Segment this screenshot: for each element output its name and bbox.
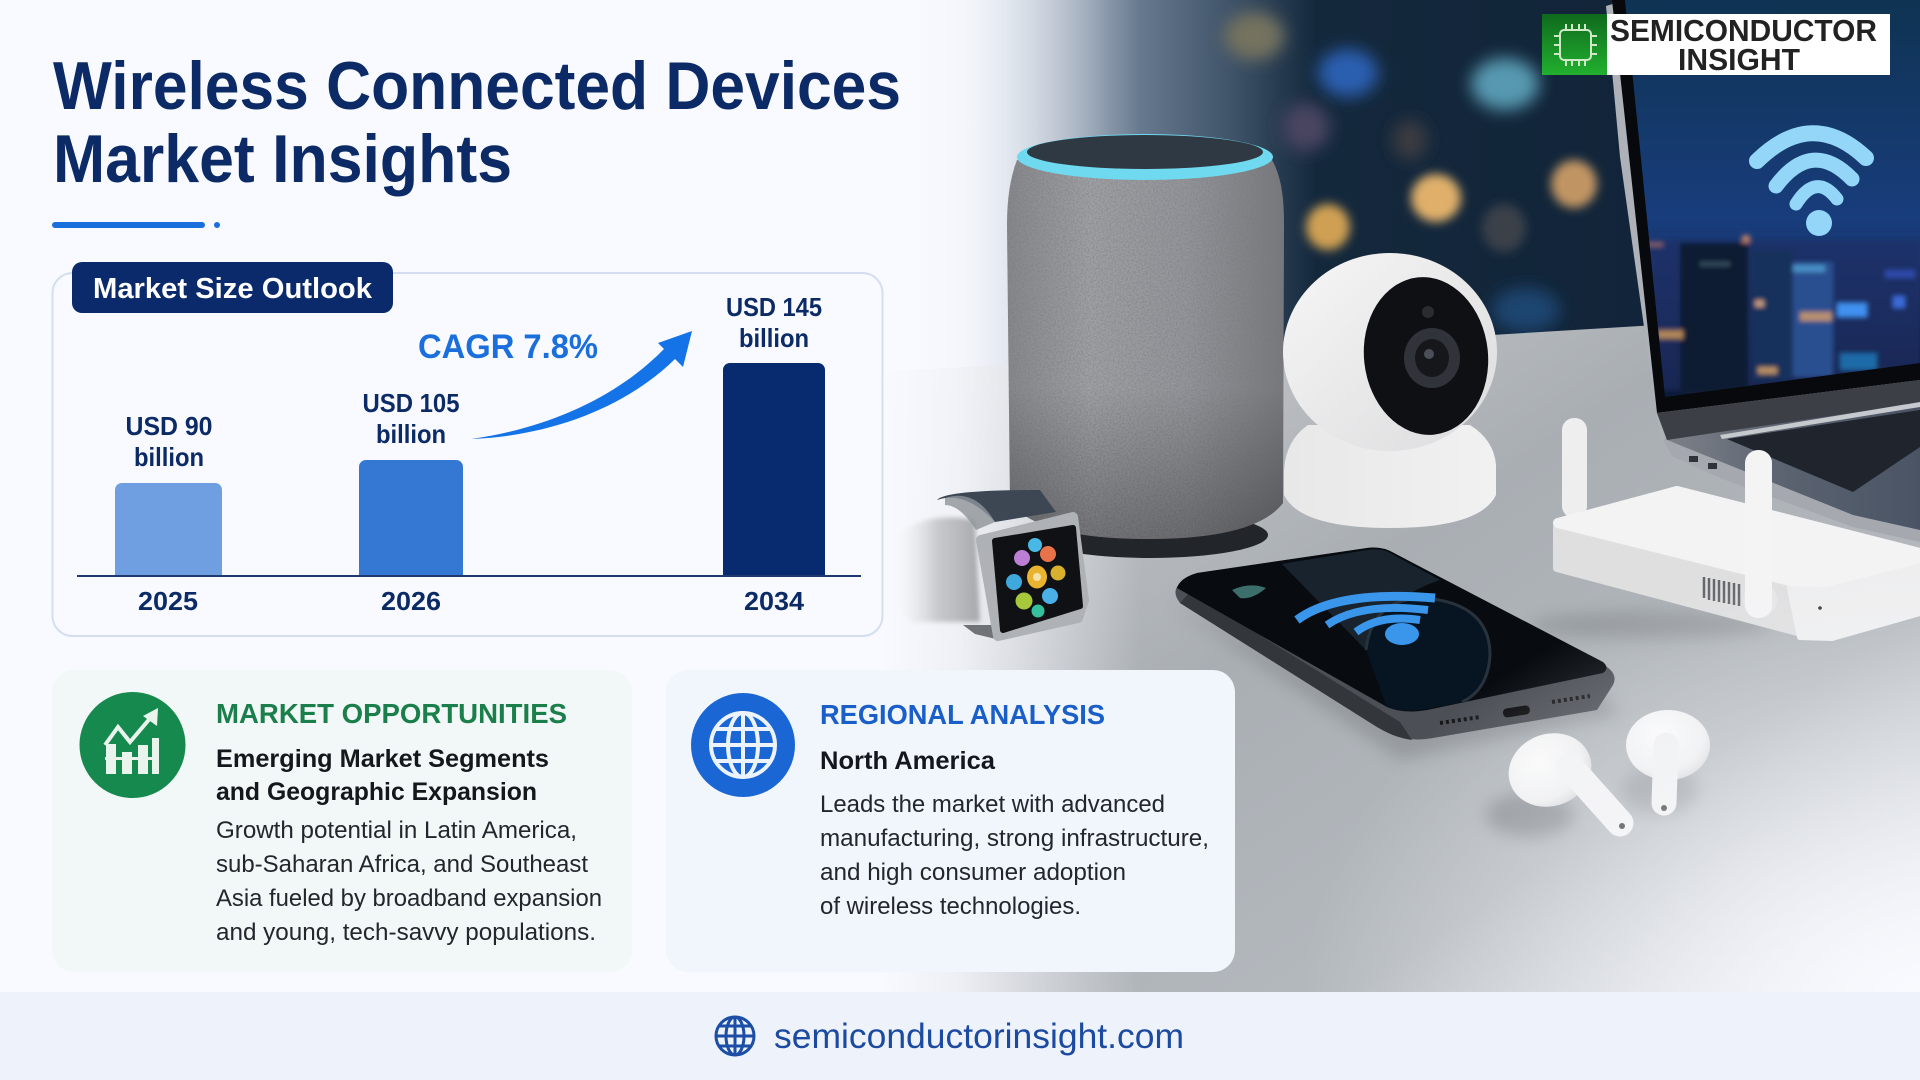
body text: opportunities: sub-Saharan Africa, and Southeast	[216, 851, 588, 878]
logo: Semiconductor Insight	[1542, 13, 1890, 77]
heading: market opportunities: MARKET OPPORTUNITIES	[216, 698, 567, 729]
phone ports	[1502, 705, 1530, 718]
faded watch band	[893, 518, 980, 622]
panel: regional analysis	[666, 670, 1235, 972]
value labels: USD 90	[126, 411, 212, 441]
blurred night-window wall	[880, 0, 1920, 400]
title: Wireless Connected Devices	[53, 48, 901, 124]
table surface	[880, 310, 1920, 1000]
title underline accent	[52, 222, 220, 228]
bar chart	[77, 292, 861, 616]
subheading: emerging segments	[216, 745, 549, 806]
body text: regional	[820, 791, 1209, 920]
body text: regional: Leads the market with advanced	[820, 791, 1165, 818]
chart axis	[77, 575, 861, 577]
smart speaker	[1007, 134, 1284, 558]
security camera	[1283, 253, 1497, 528]
icon: growth chart	[80, 692, 186, 798]
value labels: USD 145	[726, 292, 822, 322]
photo: connected devices on a table	[880, 0, 1920, 1000]
body text: regional: and high consumer adoption	[820, 859, 1126, 886]
footer website: semiconductorinsight.com	[774, 1017, 1184, 1056]
subheading: emerging segments: and Geographic Expansion	[216, 778, 537, 806]
speaker light ring	[1017, 134, 1273, 180]
icon: wi-fi on laptop screen	[1757, 133, 1866, 236]
badge: market size outlook	[72, 262, 393, 313]
logo: Semiconductor Insight: SEMICONDUCTOR	[1610, 13, 1877, 48]
smartwatch	[893, 490, 1084, 640]
phone body	[1175, 548, 1615, 739]
value labels: billion	[739, 323, 809, 353]
lower-right and bottom vignette	[1300, 560, 1920, 1000]
left earbud	[1498, 722, 1602, 818]
subheading: North America: North America	[820, 747, 996, 775]
logo: Semiconductor Insight: INSIGHT	[1678, 42, 1800, 77]
title	[53, 48, 901, 197]
footer band	[0, 992, 1920, 1080]
value labels	[126, 292, 822, 472]
body text: opportunities: Asia fueled by broadband expansion	[216, 885, 602, 912]
panel: market size outlook	[52, 262, 882, 636]
year labels: 2026	[381, 586, 441, 616]
router vent	[1704, 577, 1739, 606]
body text: opportunities: Growth potential in Latin America,	[216, 817, 577, 844]
laptop	[1606, 0, 1920, 542]
router antenna rear	[1562, 418, 1587, 518]
watch case	[981, 517, 1084, 636]
icon: footer globe	[716, 1017, 754, 1055]
bokeh city lights	[1224, 12, 1597, 332]
router antenna front	[1743, 583, 1777, 617]
title: Market Insights	[53, 121, 512, 197]
body text: regional: of wireless technologies.	[820, 893, 1081, 920]
year labels: 2025	[138, 586, 198, 616]
speaker base	[1032, 512, 1268, 558]
laptop screen city skyline	[1647, 235, 1920, 393]
icon: globe	[691, 693, 795, 797]
app icons	[1006, 538, 1066, 618]
heading: regional analysis: REGIONAL ANALYSIS	[820, 699, 1105, 730]
icon: microchip	[1554, 24, 1597, 66]
value labels: billion	[376, 419, 446, 449]
laptop keyboard deck	[1663, 436, 1920, 542]
body text: opportunities: and young, tech-savvy populations.	[216, 919, 596, 946]
badge: market size outlook: Market Size Outlook	[93, 273, 373, 305]
panel: market opportunities	[52, 670, 632, 972]
body text: regional: manufacturing, strong infrastructure,	[820, 825, 1209, 852]
bar: 2025	[115, 483, 222, 576]
right earbud	[1626, 710, 1710, 780]
icon: wi-fi on phone screen	[1297, 596, 1435, 645]
year labels: 2034	[744, 586, 805, 616]
subheading: emerging segments: Emerging Market Segments	[216, 745, 549, 773]
soft left fade over wall and table	[880, 0, 1140, 1000]
bar: 2034	[723, 363, 825, 576]
laptop lid frame	[1606, 0, 1920, 440]
body text: opportunities	[216, 817, 602, 946]
wireless earbuds	[1486, 710, 1710, 837]
smartphone	[1165, 548, 1620, 760]
value labels: billion	[134, 442, 204, 472]
growth arrow	[471, 331, 692, 439]
wi-fi router	[1530, 418, 1920, 639]
phone screen	[1177, 548, 1606, 711]
value labels: USD 105	[362, 388, 460, 418]
watch screen	[995, 528, 1080, 630]
bar: 2026	[359, 460, 463, 576]
year labels	[138, 586, 805, 616]
CAGR label: CAGR 7.8%	[418, 328, 598, 366]
